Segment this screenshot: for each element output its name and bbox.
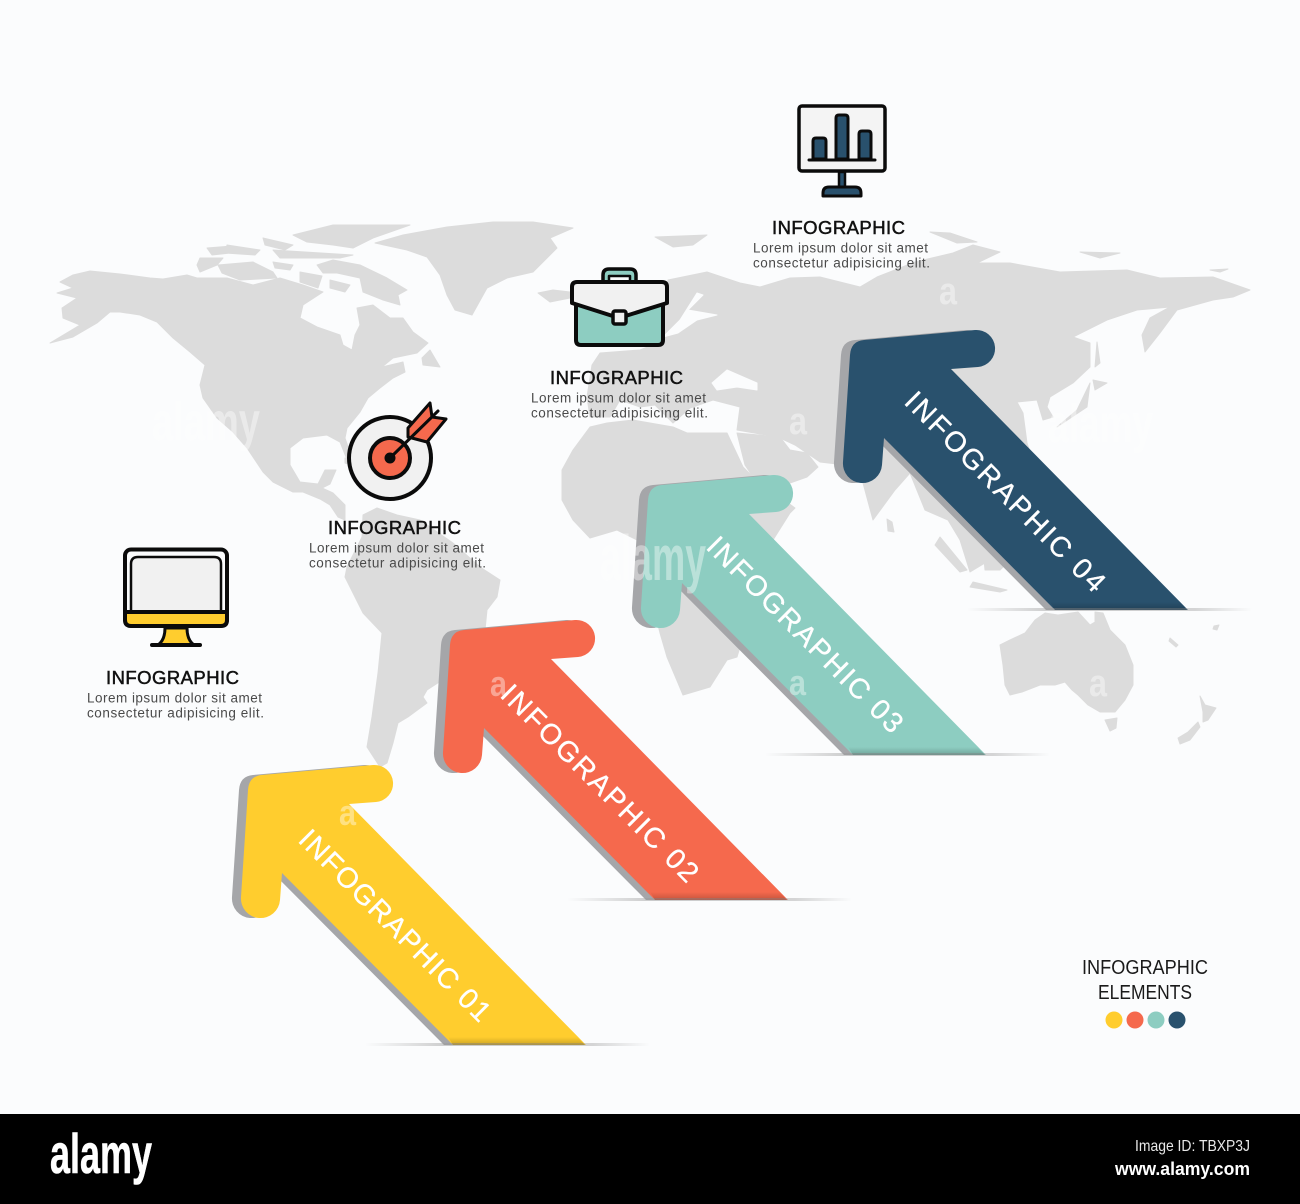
Iceland and Newfoundland — [422, 290, 570, 367]
legend colour dots — [1106, 1012, 1186, 1028]
watermarks on map — [152, 271, 1153, 705]
image id: Image ID: TBXP3J — [1135, 1138, 1250, 1155]
arrow label 01: INFOGRAPHIC 01 — [292, 823, 497, 1028]
watermarks on arrows: a — [339, 792, 357, 833]
watermarks on arrows: alamy — [600, 522, 706, 594]
text block 4: INFOGRAPHIC — [772, 217, 905, 238]
text block 3: Lorem ipsum dolor sit amet — [531, 390, 706, 406]
arrow label 04: INFOGRAPHIC 04 — [898, 385, 1112, 599]
arrow 04 navy — [834, 330, 1252, 611]
footer bar — [0, 1114, 1300, 1204]
Arctic Eurasia islands — [655, 232, 1228, 272]
arrow 01 yellow — [232, 765, 650, 1046]
watermarks on map: a — [1089, 663, 1108, 705]
Africa — [562, 420, 795, 695]
watermarks on arrows — [339, 522, 807, 833]
Arabia — [737, 433, 818, 483]
world map — [50, 222, 1250, 767]
watermarks on map: a — [939, 271, 958, 313]
icon: monitor — [125, 550, 227, 645]
watermarks on map: alamy — [1048, 394, 1153, 454]
text block 4: consectetur adipisicing elit. — [753, 256, 930, 270]
icon: briefcase — [572, 269, 667, 345]
Central American islands — [345, 458, 368, 469]
watermarks on map: a — [789, 401, 808, 443]
legend title: INFOGRAPHIC — [1082, 957, 1208, 979]
arrow 03 teal — [632, 475, 1050, 756]
legend title — [1082, 957, 1208, 1004]
South America — [345, 508, 500, 767]
text block 3 — [531, 367, 708, 420]
icon: target — [349, 403, 446, 499]
Australia — [1000, 612, 1133, 731]
text block 4: Lorem ipsum dolor sit amet — [753, 240, 928, 256]
text block 1: consectetur adipisicing elit. — [87, 706, 264, 720]
watermarks on map: alamy — [152, 392, 260, 452]
watermarks on arrows: a — [490, 663, 508, 704]
text block 1: INFOGRAPHIC — [106, 667, 239, 688]
arrow label 02: INFOGRAPHIC 02 — [494, 678, 705, 889]
text block 2: INFOGRAPHIC — [328, 517, 461, 538]
Pacific islands — [1169, 625, 1219, 647]
watermarks on arrows: a — [789, 662, 807, 703]
text block 2 — [309, 517, 486, 570]
text block 1: Lorem ipsum dolor sit amet — [87, 690, 262, 706]
Arctic Canada islands — [197, 225, 410, 305]
text block 2: Lorem ipsum dolor sit amet — [309, 540, 484, 556]
arrow 02 red — [434, 620, 852, 901]
text block 2: consectetur adipisicing elit. — [309, 556, 486, 570]
text block 1 — [87, 667, 264, 720]
Eurasia — [587, 245, 1250, 572]
Sri Lanka, Indonesia and Japan — [887, 342, 1107, 592]
legend title: ELEMENTS — [1098, 982, 1192, 1004]
icon: chart display — [799, 106, 885, 196]
Greenland — [375, 222, 573, 315]
New Zealand — [1178, 696, 1216, 744]
text block 4 — [753, 217, 930, 270]
text block 3: consectetur adipisicing elit. — [531, 406, 708, 420]
arrow label 03: INFOGRAPHIC 03 — [700, 530, 909, 740]
North America — [50, 271, 428, 520]
Black Sea and Baltic — [663, 293, 757, 390]
text block 3: INFOGRAPHIC — [550, 367, 683, 388]
footer logo: alamy — [50, 1122, 152, 1185]
website: www.alamy.com — [1114, 1159, 1250, 1179]
